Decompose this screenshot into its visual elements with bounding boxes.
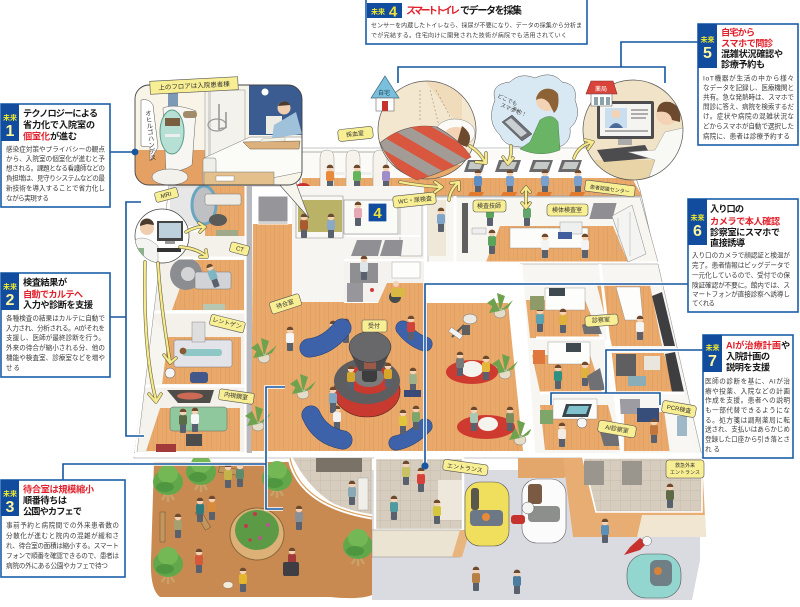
blood collection cubicles <box>296 150 390 191</box>
building front wall <box>134 453 704 457</box>
badge 1: 未来 <box>3 113 17 122</box>
heading: 診察室にスマホで <box>710 226 780 238</box>
heading: 順番待ちは <box>23 494 67 506</box>
tag: reception <box>362 320 387 332</box>
heading: 入院計画の <box>726 350 770 362</box>
body text: せる <box>6 364 20 372</box>
room tags <box>154 126 704 478</box>
body text: れ、待合室の面積は縮小する。スマート <box>6 541 119 550</box>
tag: specimen lab <box>547 204 588 216</box>
tag: entrance <box>442 459 488 476</box>
badge 6: 6 <box>693 223 702 240</box>
flower bed <box>230 508 284 560</box>
tag: AI exam room: AI診察室 <box>605 423 629 435</box>
body text: 病院に、患者は診療予約する <box>703 132 790 140</box>
consultation rooms <box>520 264 702 456</box>
panel: future 3 <box>1 480 125 577</box>
doctor online consultation popup <box>583 80 692 180</box>
heading <box>23 276 93 310</box>
X-ray room <box>143 315 241 384</box>
icon: pharmacy <box>586 81 617 106</box>
body text: 機能や検査室、診療室などを増や <box>6 353 105 362</box>
tag: emergency entrance <box>666 460 704 478</box>
garden people <box>174 463 303 592</box>
heading: 混雑状況確認や <box>721 48 783 59</box>
badge 6: 未来 <box>690 213 704 222</box>
tag: patient ID center: 患者認識センター <box>590 184 630 195</box>
potted plants <box>245 293 533 445</box>
cloud: smartphone reservation: どこでも <box>496 92 519 108</box>
arrows from technician to scanners <box>145 223 207 402</box>
tag: X-ray <box>209 314 246 333</box>
tag: endoscopy <box>218 389 255 404</box>
icon: pharmacy: 薬局 <box>595 85 607 93</box>
left column rooms <box>136 186 252 454</box>
heading <box>710 204 781 248</box>
body text: センサーを内蔵したトイレなら、採尿が不要になり、データの採集から分析ま <box>371 22 582 30</box>
right wing: emergency entrance <box>518 458 706 543</box>
badge 6 <box>688 199 707 245</box>
body text: 入力され、分析される。AIがそれを <box>6 324 105 332</box>
tag: lab technician: 検査技師 <box>477 202 501 210</box>
technician vignette <box>135 209 189 265</box>
heading: 入り口の <box>710 204 744 214</box>
body text: 入り口のカメラで顔認証と検温が <box>692 250 790 260</box>
badge 1: 1 <box>6 123 15 140</box>
body text: 支援し、医師が最終診断を行う。 <box>6 333 105 342</box>
body text: 感染症対策やプライバシーの観点 <box>6 144 105 154</box>
connector 2 <box>110 202 144 436</box>
panel: future 6 <box>688 199 798 312</box>
tag: waiting room <box>269 293 302 314</box>
heading: 検査結果が <box>23 276 67 288</box>
badge 5 <box>698 24 717 68</box>
heading <box>721 26 783 70</box>
panel: future 1 <box>1 104 110 207</box>
tag: X-ray: レントゲン <box>211 315 243 331</box>
body text: 険証確認が不要に。館内では、ス <box>692 280 790 290</box>
body text: なデータを記録し、医療機関と <box>703 83 794 92</box>
marker: future 4 <box>368 203 387 222</box>
body text: 共有。急な発熱時は、スマホで <box>703 92 794 102</box>
body text: 一元化しているので、受付での保 <box>692 270 790 280</box>
panel: future 7 <box>703 335 793 458</box>
body text: 医師の診断を基に、AIが治 <box>705 376 790 386</box>
badge 7: 7 <box>708 353 717 370</box>
panel: future 5 <box>698 24 798 145</box>
label: upper floor ward: 上のフロアは入院患者棟 <box>158 79 230 92</box>
tag: waiting room: 待合室 <box>275 297 295 311</box>
body text: 外来の待合が縮小される分、他の <box>6 343 105 352</box>
tag: exam room: 診察室 <box>592 315 610 325</box>
body text <box>6 520 119 570</box>
badge 2: 未来 <box>3 282 17 291</box>
tag: MRI: MRI <box>160 192 173 200</box>
badge 3: 3 <box>6 499 15 516</box>
connector 3 <box>63 387 285 509</box>
main waiting hall floor <box>245 196 533 451</box>
tag: blood collection <box>337 126 374 142</box>
corridor doors <box>302 258 334 273</box>
teal car <box>624 536 681 598</box>
hospital building shell <box>134 148 702 458</box>
panel: future 2 <box>1 273 110 377</box>
mid-right lab <box>610 352 684 392</box>
MRI room <box>165 186 246 236</box>
tag: WC <box>392 192 437 208</box>
badge 2 <box>1 273 19 310</box>
exam room 1 <box>526 288 602 338</box>
connector 7 <box>551 350 703 405</box>
body text: も一部代替できるようにな <box>705 406 790 414</box>
badge 4: 4 <box>389 4 398 20</box>
body text: IoT機器が生活の中から様々 <box>703 74 794 82</box>
badge 4: 未来 <box>371 7 385 16</box>
tag: PCR <box>661 400 697 418</box>
badge 1 <box>1 104 19 141</box>
heading: 自宅から <box>721 26 755 38</box>
body text: 作成を支援。患者への説明 <box>705 396 790 404</box>
badge 2: 2 <box>6 292 15 309</box>
tag: entrance: エントランス <box>447 463 483 474</box>
body text <box>371 22 582 40</box>
heading: 待合室は規模縮小 <box>23 484 95 494</box>
PCR test room <box>617 395 694 454</box>
badge 5: 未来 <box>700 35 714 44</box>
connector 6 <box>421 284 688 470</box>
body text <box>703 74 794 140</box>
badge 3: 未来 <box>3 489 17 498</box>
trees <box>153 455 373 584</box>
tag: lab technician <box>473 200 506 212</box>
body text <box>705 376 790 454</box>
cloud: smartphone reservation: スマホで <box>499 101 522 117</box>
tag: CT: CT <box>235 246 245 254</box>
body text: 想される。課題となる看護師などの <box>6 164 105 172</box>
tag: blood collection: 採血室 <box>346 129 364 139</box>
tag: emergency entrance: エントランス <box>670 470 700 476</box>
tag: CT <box>229 242 250 256</box>
heading <box>406 4 522 17</box>
cloud: smartphone reservation <box>491 75 578 154</box>
tag: patient ID center <box>584 180 635 197</box>
body text: ながら実現する <box>6 194 49 202</box>
road and car park <box>372 470 700 600</box>
bed and patient <box>203 101 302 186</box>
heading: 診療予約も <box>721 58 765 70</box>
body text: でが完結する。住宅向けに開発された技術が病院でも活用されていく <box>371 32 567 40</box>
tag: AI exam room <box>597 420 637 438</box>
entrance plaza <box>290 458 470 557</box>
tag: endoscopy: 内視鏡室 <box>224 390 248 402</box>
body text: 完了。患者情報はビッグデータで <box>692 260 790 270</box>
heading: スマホで問診 <box>721 38 774 48</box>
white car <box>522 479 566 543</box>
body text: から、入院室の個室化が進むと予 <box>6 154 105 163</box>
badge 4 <box>367 3 402 20</box>
icon: home house: 自宅 <box>378 89 390 97</box>
body text: 負担増は、見守りシステムなどの最 <box>6 174 105 182</box>
body text: 病院の外にある公園やカフェで待つ <box>6 561 108 570</box>
badge 7: 未来 <box>706 343 720 352</box>
CT room <box>170 258 244 310</box>
inpatient ward popup <box>135 77 309 218</box>
heading: でデータを採集 <box>460 4 522 17</box>
sofa guests <box>399 316 421 434</box>
badge 7 <box>703 335 722 372</box>
body text: 問診に答え、病院を検索するだ <box>703 102 794 111</box>
home popup: patient in bed <box>378 80 476 180</box>
heading: スマートトイレ <box>406 5 460 17</box>
pillow and head <box>435 119 475 147</box>
body text: 登録した口座から引き落とさ <box>705 434 790 444</box>
heading: テクノロジーによる <box>23 108 98 118</box>
tag: specimen lab: 検体検査室 <box>552 206 582 214</box>
body text: マートフォンが直接診察へ誘導し <box>692 290 790 298</box>
robot speech bubble: オヒルゴハンデス <box>143 109 156 162</box>
red chairs and tables <box>446 352 515 439</box>
heading: が進む <box>50 130 77 142</box>
body text <box>6 144 105 202</box>
exam room 2 <box>532 342 605 392</box>
body text: フォンで順番を確認できるので、患者は <box>6 551 119 560</box>
heading: AIが治療計画 <box>726 340 781 350</box>
connector 1 <box>110 149 138 155</box>
body text <box>692 250 790 308</box>
heading: 個室化 <box>23 130 50 142</box>
tag: WC: WC・尿検査 <box>398 194 432 206</box>
body text: てくれる <box>692 300 715 308</box>
tag: reception: 受付 <box>368 322 380 330</box>
striped blanket <box>380 126 472 180</box>
body text: 分散化が進むと院内の混雑が緩和さ <box>6 531 119 540</box>
garden with trees and visitors <box>151 455 373 598</box>
upper-right lab <box>597 285 675 346</box>
toilet and urinalysis block <box>258 186 426 303</box>
cloud: smartphone reservation: 予約！ <box>510 105 528 119</box>
cars and street people <box>465 479 681 598</box>
panel: future 4 <box>366 0 587 44</box>
delivery robot <box>152 106 197 185</box>
lab and specimen rooms <box>428 196 658 263</box>
heading: 省力化で入院室の <box>23 119 95 130</box>
heading: 説明を支援 <box>726 362 770 372</box>
endoscopy room <box>139 388 240 452</box>
heading <box>726 340 790 372</box>
badge 5: 5 <box>703 45 712 62</box>
icon: home house <box>371 76 399 111</box>
heading: 入力や診断を支援 <box>23 299 93 310</box>
robot speech bubble <box>141 100 158 162</box>
badge 3 <box>1 480 19 516</box>
reception monitors <box>464 160 638 196</box>
heading <box>23 108 98 142</box>
body text: 事前予約と病院間での外来患者数の <box>6 520 119 530</box>
body text: 各種検査の結果はカルテに自動で <box>6 314 105 322</box>
lobby staff and visitors <box>286 319 350 430</box>
red scooter and robot <box>511 502 534 524</box>
tag: exam room <box>585 314 618 327</box>
body text: れる <box>705 446 720 454</box>
cleaning robot <box>449 314 477 339</box>
benches <box>160 466 243 542</box>
heading: 公園やカフェで <box>23 506 82 516</box>
heading: カメラで本人確認 <box>710 216 781 226</box>
body text: どからスマホが自動で選択した <box>703 122 794 130</box>
body text: る。処方箋は調剤薬局に転 <box>705 416 790 424</box>
arrows: data flow from home to clinic <box>400 140 593 208</box>
yellow car <box>465 482 509 546</box>
connector 5 <box>398 42 698 83</box>
tag: PCR: PCR検査 <box>666 403 692 415</box>
AI consultation room <box>540 399 621 450</box>
tag: MRI <box>154 187 179 203</box>
marker: future 4: 4 <box>373 205 382 222</box>
body text: 新技術を導入することで省力化し <box>6 184 105 192</box>
blue sofas <box>309 328 425 443</box>
heading: や <box>781 340 790 350</box>
body text: 療や投薬、入院などの計画 <box>705 386 790 396</box>
body text <box>6 314 105 372</box>
body text: 送され、支払いはあらかじめ <box>705 424 790 434</box>
back row rooms <box>296 150 642 196</box>
tag: emergency entrance: 救急外来 <box>675 462 695 469</box>
heading: 直接誘導 <box>710 237 745 248</box>
label: upper floor ward <box>150 77 238 94</box>
heading: 自動でカルテへ <box>23 288 83 300</box>
heading <box>23 484 95 516</box>
central reception desk <box>329 332 400 417</box>
body text: け。症状や病院の混雑状況な <box>703 112 794 120</box>
